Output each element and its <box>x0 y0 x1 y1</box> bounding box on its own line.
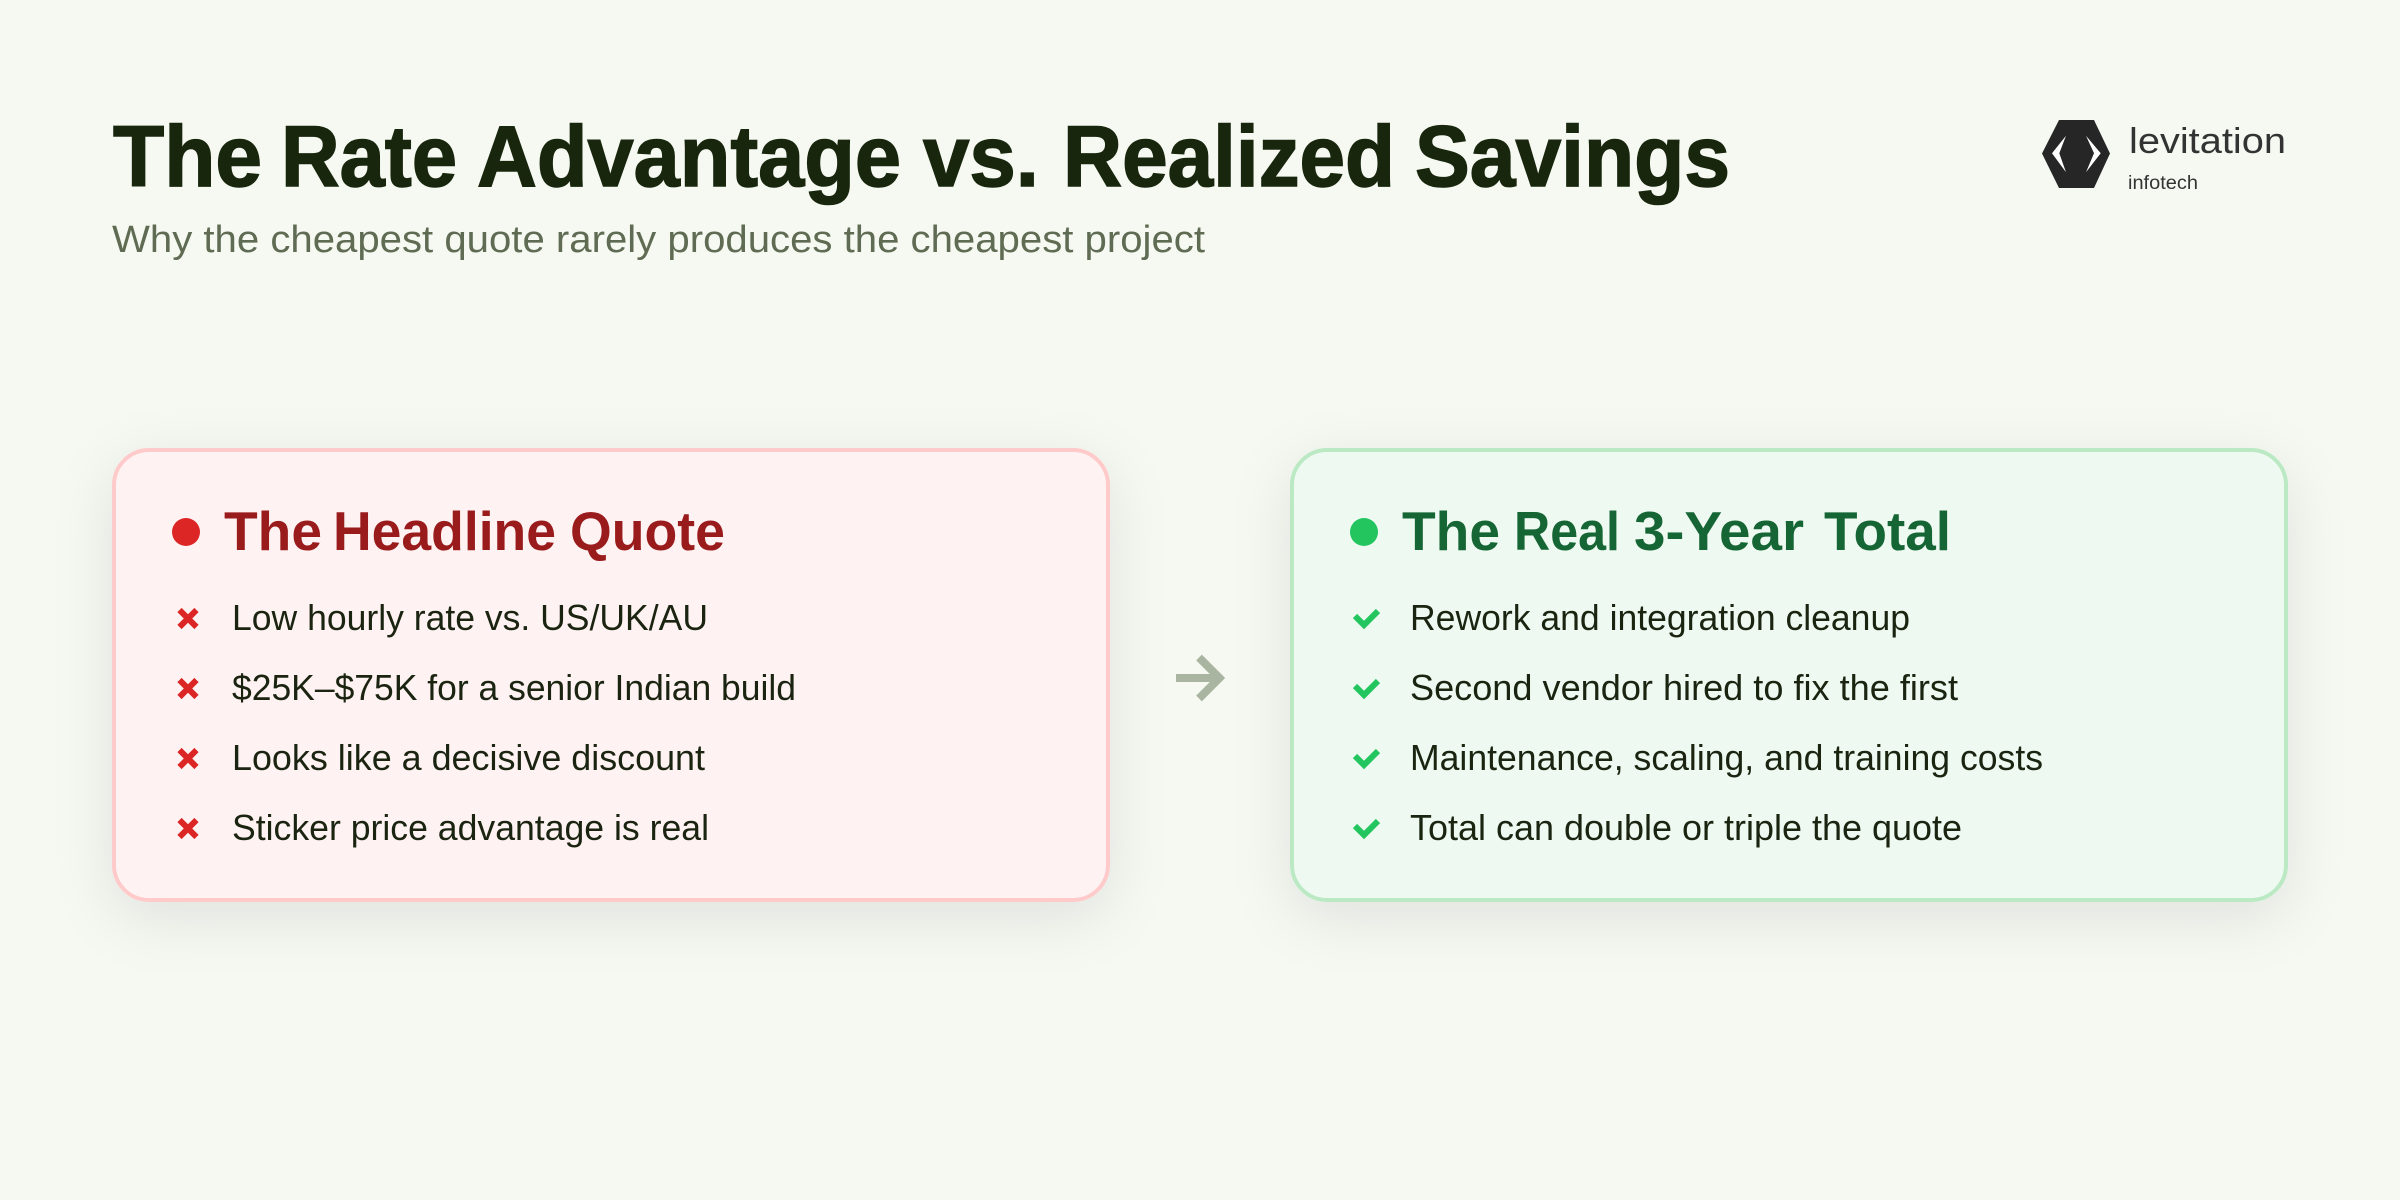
title: The <box>113 109 262 205</box>
panel heading <box>224 500 725 562</box>
title: Savings <box>1415 109 1730 205</box>
panel: the headline quote <box>114 450 1108 900</box>
logo wordmark: levitation <box>2129 120 2286 161</box>
logo: levitation infotech <box>2042 120 2286 194</box>
title: Rate <box>281 109 457 205</box>
icon: green dot <box>1350 518 1378 546</box>
panel heading: Headline <box>333 500 556 562</box>
icon: red dot <box>172 518 200 546</box>
list row 1: Rework and integration cleanup <box>1410 597 1910 638</box>
list row 4: Sticker price advantage is real <box>232 807 709 848</box>
list row 4: Total can double or triple the quote <box>1410 807 1962 848</box>
list row 2: Second vendor hired to fix the first <box>1410 667 1958 708</box>
panel heading: 3-Year <box>1634 500 1804 562</box>
panel heading: Quote <box>570 500 725 562</box>
logo sub-wordmark: infotech <box>2128 173 2198 194</box>
title <box>113 109 1730 205</box>
arrow <box>1176 658 1220 698</box>
icon: hexagon logo mark <box>2042 120 2110 188</box>
list row 2: $25K–$75K for a senior Indian build <box>232 667 796 708</box>
list row 3: Looks like a decisive discount <box>232 737 705 778</box>
list row 3: Maintenance, scaling, and training costs <box>1410 737 2043 778</box>
panel heading: Total <box>1824 500 1951 562</box>
panel heading: Real <box>1514 500 1620 562</box>
panel heading: The <box>224 500 322 562</box>
panel background <box>114 450 1108 900</box>
list row 1: Low hourly rate vs. US/UK/AU <box>232 597 708 638</box>
panel: the real 3-year total <box>1292 450 2286 900</box>
panel heading <box>1402 500 1951 562</box>
title: Realized <box>1063 109 1395 205</box>
subtitle: Why the cheapest quote rarely produces the cheapest project <box>112 219 1205 261</box>
panel background <box>1292 450 2286 900</box>
title: vs. <box>923 109 1039 205</box>
panel heading: The <box>1402 500 1500 562</box>
title: Advantage <box>477 109 901 205</box>
